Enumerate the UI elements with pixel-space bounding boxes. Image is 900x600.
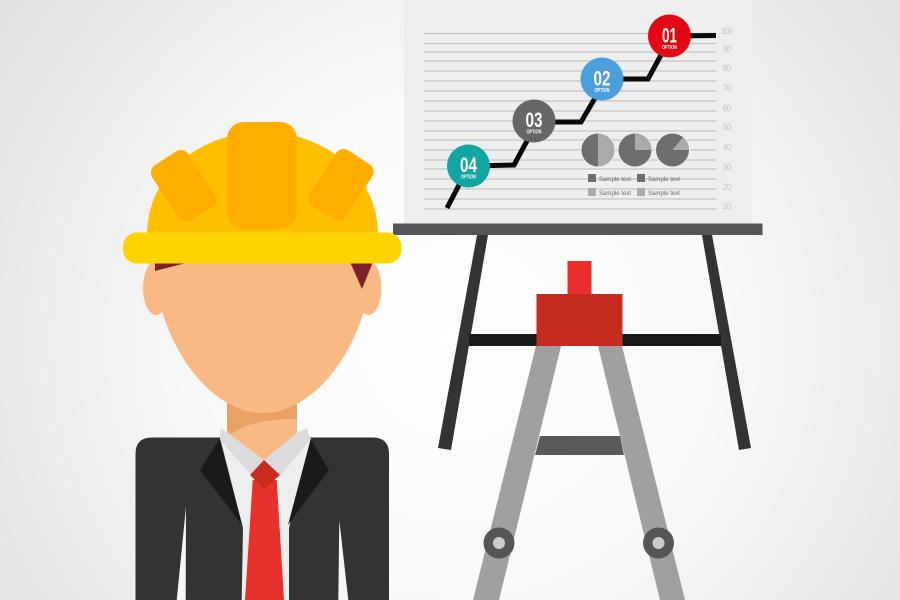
tie knot bbox=[250, 460, 280, 489]
helmet brim bbox=[123, 232, 402, 264]
legend: Sample text bbox=[648, 176, 680, 183]
axis labels: 40 bbox=[723, 142, 731, 152]
pie chart 2 bbox=[618, 132, 652, 168]
jacket bbox=[136, 438, 389, 600]
pie chart 3 bbox=[655, 132, 690, 168]
option 02 bbox=[580, 58, 624, 100]
option 04 bbox=[447, 144, 490, 188]
easel back legs bbox=[438, 235, 751, 450]
neck shadow bbox=[227, 395, 297, 434]
easel black crossbar bbox=[469, 334, 721, 346]
option 01: OPTION bbox=[662, 45, 677, 51]
left wheel bbox=[484, 528, 514, 558]
axis labels: 80 bbox=[723, 63, 731, 73]
helmet center plate bbox=[227, 122, 297, 229]
red clamp block bbox=[536, 294, 622, 346]
easel lower crossbar bbox=[535, 436, 624, 455]
axis labels: 10 bbox=[723, 201, 731, 211]
chart grid lines bbox=[424, 34, 716, 209]
axis labels: 100 bbox=[722, 26, 732, 36]
legend: Sample text bbox=[599, 176, 631, 183]
option 02: 02 bbox=[594, 68, 610, 90]
pie chart 1 bbox=[580, 132, 616, 168]
engineer figure bbox=[123, 122, 402, 600]
option 01 bbox=[648, 14, 691, 58]
helmet dome bbox=[147, 132, 378, 236]
tie bbox=[245, 480, 284, 600]
stepped line bbox=[447, 36, 716, 208]
helmet right plate bbox=[305, 146, 377, 224]
axis labels: 50 bbox=[723, 122, 731, 132]
axis labels: 60 bbox=[723, 103, 731, 113]
lapels bbox=[200, 439, 329, 525]
option 03: 03 bbox=[526, 109, 542, 132]
option 01: 01 bbox=[662, 24, 677, 48]
legend: Sample text bbox=[599, 190, 631, 197]
easel grey front legs bbox=[473, 346, 685, 600]
presentation board bbox=[393, 0, 762, 235]
option 03 bbox=[512, 100, 556, 142]
neck bbox=[227, 395, 297, 460]
hair bbox=[155, 262, 373, 289]
face bbox=[155, 260, 371, 413]
axis labels: 30 bbox=[723, 162, 731, 172]
paper sheet bbox=[404, 0, 752, 224]
axis labels: 90 bbox=[723, 44, 731, 54]
legend bbox=[588, 174, 680, 197]
red clamp top bbox=[568, 261, 592, 294]
jacket vents bbox=[177, 507, 348, 600]
option 04: OPTION bbox=[461, 174, 476, 180]
right wheel bbox=[643, 528, 674, 558]
easel bbox=[438, 235, 751, 600]
option 03: OPTION bbox=[526, 130, 542, 136]
axis labels bbox=[722, 26, 732, 211]
ears bbox=[143, 261, 382, 315]
option 04: 04 bbox=[460, 154, 477, 177]
shirt bbox=[220, 438, 311, 600]
option 02: OPTION bbox=[594, 88, 610, 94]
helmet left plate bbox=[147, 147, 220, 225]
board shelf bbox=[393, 224, 762, 235]
legend: Sample text bbox=[648, 190, 680, 197]
hard hat bbox=[123, 122, 402, 264]
collar bbox=[220, 428, 310, 476]
axis labels: 20 bbox=[723, 182, 731, 192]
axis labels: 70 bbox=[723, 83, 731, 93]
